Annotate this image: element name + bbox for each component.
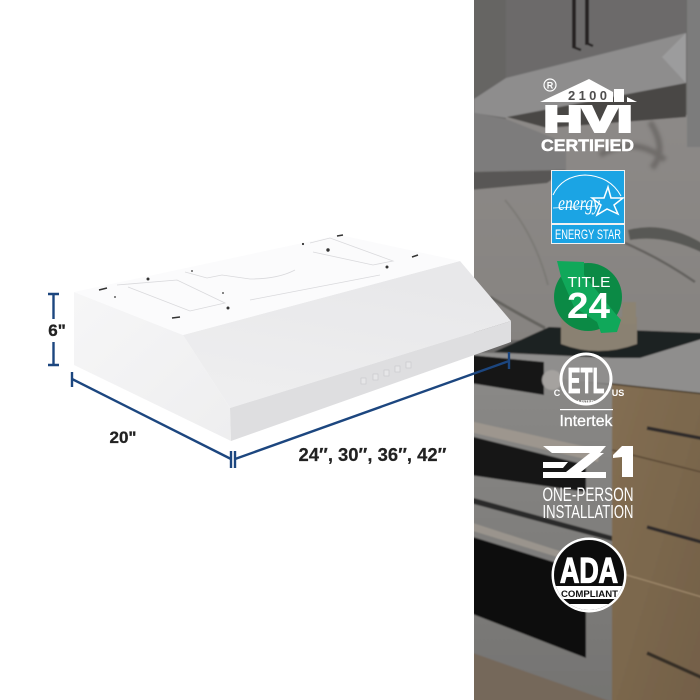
label: widths: 24″, 30″, 36″, 42″ (298, 445, 447, 465)
icon: ENERGY STAR badge (551, 170, 625, 244)
cooktop and pot (494, 302, 700, 358)
icon: ETL listed Intertek badge: US (612, 388, 624, 398)
icon: EZ1 one-person installation logo: INSTALLATION (542, 501, 634, 522)
upper cabinet (470, 0, 700, 147)
hood front fascia (230, 321, 511, 441)
icon: ENERGY STAR badge: energy (558, 191, 601, 215)
icon: ETL listed Intertek badge (554, 354, 624, 430)
label: 20 inches: 20" (110, 428, 136, 447)
icon: ETL listed Intertek badge: ETL (568, 360, 604, 401)
icon: ETL listed Intertek badge: C (554, 388, 561, 398)
arrow: width bracket (235, 352, 509, 468)
certified word: CERTIFIED (541, 136, 634, 155)
icon: Title 24 California badge (554, 261, 622, 333)
icon: EZ1 one-person installation logo: ONE-PERSON (542, 484, 634, 506)
icon: ETL listed Intertek badge: Intertek (560, 413, 613, 430)
icon: ADA compliant badge: ADA (560, 552, 618, 590)
hood top plate (74, 235, 460, 335)
panel: kitchen photo background (470, 0, 700, 700)
marble backsplash (470, 115, 700, 340)
HVI letters: HVI (544, 98, 632, 140)
icon: Title 24 California badge: 24 (567, 285, 610, 326)
icon: ADA compliant badge: COMPLIANT (561, 589, 618, 600)
label: 6 inches: 6" (48, 321, 66, 340)
hood sloped front (183, 261, 511, 408)
wood drawers (612, 384, 700, 700)
countertop (470, 338, 700, 394)
oven range (470, 355, 612, 700)
icon: HVI certified badge: 2100 (568, 88, 607, 103)
icon: EZ1 one-person installation logo (542, 446, 634, 522)
icon: ETL listed Intertek badge: LISTED (578, 399, 595, 404)
control buttons (361, 362, 411, 384)
lower-left wall cabinet (470, 112, 566, 190)
registered mark: R (547, 80, 554, 90)
icon: ADA compliant badge (550, 538, 628, 614)
hood side face (74, 292, 231, 441)
icon: Title 24 California badge: TITLE (568, 274, 610, 291)
house roof (540, 79, 637, 102)
arrow: 20 inch depth bracket (72, 372, 231, 468)
photo range hood (474, 33, 686, 128)
arrow: 6 inch height bracket (48, 294, 59, 365)
icon: ENERGY STAR badge: ENERGY STAR (555, 226, 621, 242)
icon: HVI certified badge (540, 79, 637, 155)
panel: range hood product illustration (74, 235, 511, 441)
